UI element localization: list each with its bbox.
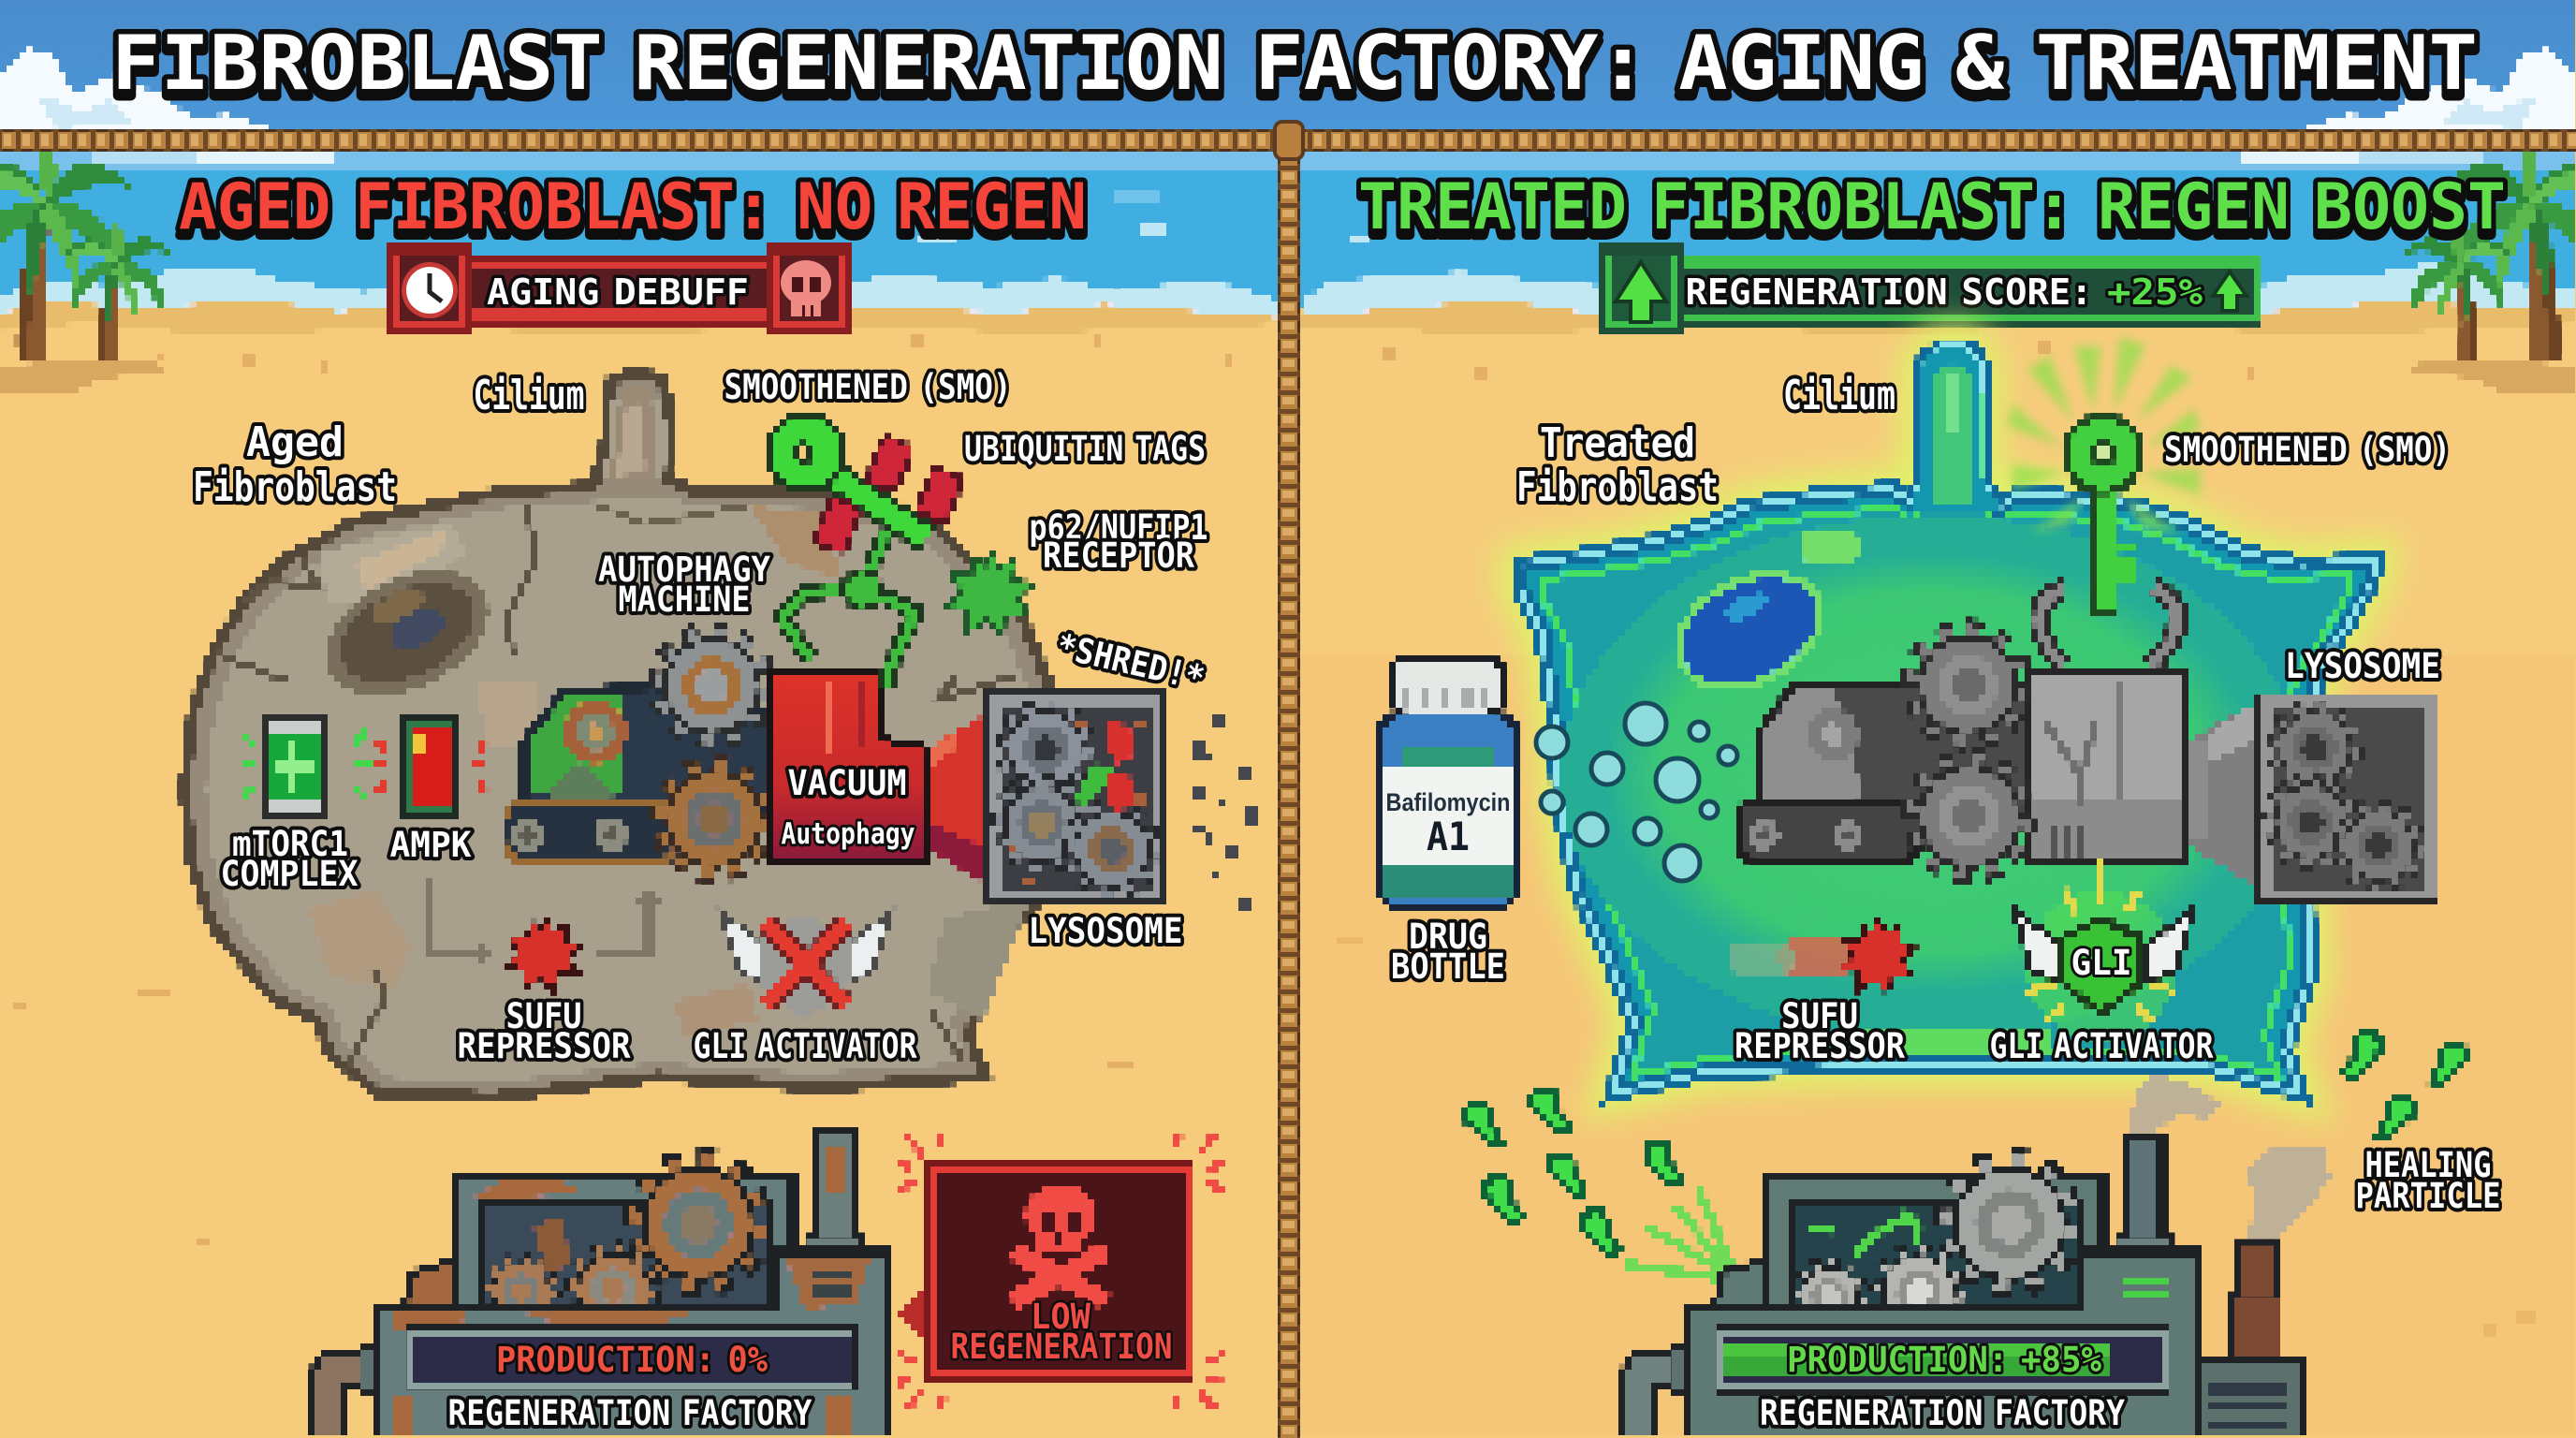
factory body	[1640, 1135, 2303, 1438]
alert sign	[898, 1159, 1195, 1384]
label: regeneration factory: REGENERATION FACTORY	[1760, 1393, 2126, 1433]
title: FIBROBLAST REGENERATION FACTORY: AGING & TREATMENT	[111, 20, 2478, 107]
smoke	[2130, 1072, 2331, 1245]
rusty regeneration factory	[329, 1133, 888, 1438]
badge value: +25%	[2107, 271, 2203, 313]
label: SUFU repressor: SUFU	[1781, 996, 1858, 1036]
label: autophagy machine: AUTOPHAGY	[598, 550, 771, 590]
label: drug bottle: BOTTLE	[1391, 946, 1505, 987]
label: AMPK: AMPK	[389, 825, 472, 865]
label: shred: *SHRED!*	[1053, 626, 1208, 698]
grey machine	[1734, 588, 2254, 886]
machine housing	[503, 630, 777, 875]
label: vacuum: VACUUM	[788, 763, 906, 803]
panel: aged fibroblast	[179, 170, 1258, 1438]
badge frame	[386, 245, 850, 337]
cell glow	[1520, 346, 2376, 1093]
callout: low regeneration	[898, 1135, 1222, 1410]
label: p62 receptor: p62/NUFIP1	[1030, 507, 1208, 548]
label: treated fibroblast: Treated	[1540, 419, 1695, 467]
healing particles	[1462, 1031, 2469, 1257]
label: cilium: Cilium	[1783, 372, 1895, 419]
label: lysosome: LYSOSOME	[1028, 911, 1183, 951]
label: cilium: Cilium	[474, 372, 584, 419]
label: drug bottle	[1391, 917, 1505, 987]
panel: treated fibroblast	[1358, 170, 2506, 1438]
label: aged fibroblast	[193, 418, 397, 511]
labels: treated panel	[1391, 372, 2501, 1216]
green energy streaks	[1624, 1189, 1734, 1279]
label: autophagy machine	[598, 550, 771, 620]
key	[2062, 413, 2144, 613]
icon: mTORC1 battery	[240, 714, 371, 819]
icon: clock	[402, 262, 458, 318]
label: aged fibroblast: Aged	[246, 418, 344, 466]
icon: AMPK battery	[374, 714, 487, 819]
label: lysosome: LYSOSOME	[2285, 646, 2440, 686]
palm trees left	[0, 138, 171, 361]
label: mTORC1 complex: COMPLEX	[221, 854, 358, 894]
nucleus: aged	[306, 547, 508, 719]
icon: green claw	[782, 533, 915, 691]
label: healing particle: HEALING	[2364, 1145, 2492, 1185]
label: mTORC1 complex: mTORC1	[232, 824, 348, 864]
burst ticks	[899, 1135, 1222, 1410]
label: GLI activator: GLI ACTIVATOR	[693, 1026, 917, 1066]
icon: activated smoothened key	[2008, 337, 2200, 613]
shield label: GLI	[2071, 943, 2132, 983]
factory body	[329, 1133, 888, 1438]
label: GLI activator: GLI ACTIVATOR	[1990, 1026, 2214, 1066]
label: healing particle	[2355, 1145, 2501, 1216]
label: SUFU repressor	[457, 996, 631, 1066]
label: SUFU repressor	[1734, 996, 1906, 1066]
icon: SUFU repressor fading	[1728, 916, 1919, 996]
heading: treated: TREATED FIBROBLAST: REGEN BOOST	[1358, 170, 2506, 244]
heading: aged: AGED FIBROBLAST: NO REGEN	[179, 170, 1087, 244]
shield art	[2014, 861, 2193, 1041]
labels: aged panel	[193, 367, 1208, 1066]
label: ubiquitin tags: UBIQUITIN TAGS	[964, 429, 1206, 469]
vacuum	[768, 668, 986, 885]
badge frame	[1599, 245, 2263, 337]
label: treated fibroblast	[1516, 419, 1719, 511]
icon: GLI shield active	[2014, 861, 2193, 1041]
badge: aging debuff	[386, 245, 850, 337]
icon: small up arrow	[2213, 271, 2247, 311]
icon: big up arrow	[1616, 262, 1666, 322]
label: mTORC1 complex	[221, 824, 358, 894]
icon: disabled GLI activator	[721, 913, 891, 1020]
lysosome: aged	[984, 689, 1168, 906]
label: low regeneration: REGENERATION	[951, 1327, 1172, 1367]
label: treated fibroblast: Fibroblast	[1516, 463, 1719, 511]
production readout: 85%: PRODUCTION: +85%	[1787, 1340, 2102, 1380]
label: aged fibroblast: Fibroblast	[193, 463, 397, 511]
label: regeneration factory: REGENERATION FACTORY	[447, 1393, 812, 1433]
bottle label: A1	[1427, 814, 1470, 859]
production readout: 0%: PRODUCTION: 0%	[496, 1340, 768, 1380]
icon: SUFU repressor	[504, 913, 585, 993]
icon: smoothened key with ubiquitin tags	[765, 412, 964, 553]
badge: regeneration score	[1599, 245, 2263, 337]
debris particles	[1191, 715, 1258, 910]
icon: p62 receptor	[944, 547, 1036, 638]
label: SUFU repressor: REPRESSOR	[1734, 1026, 1906, 1066]
badge label: AGING DEBUFF	[487, 271, 749, 313]
autophagy machine	[503, 630, 1168, 906]
icon: skull	[781, 260, 831, 316]
label: low regeneration: LOW	[1031, 1297, 1091, 1337]
label: healing particle: PARTICLE	[2355, 1176, 2501, 1216]
lysosome: treated	[2254, 692, 2440, 905]
icon: drug bottle	[1377, 655, 1519, 910]
key glow rays	[2008, 337, 2200, 534]
label: autophagy: Autophagy	[781, 817, 915, 851]
label: autophagy machine: MACHINE	[618, 580, 751, 620]
bottle label	[1385, 788, 1511, 859]
label: low regeneration	[951, 1297, 1172, 1367]
label: drug bottle: DRUG	[1409, 917, 1487, 957]
aged cell body	[184, 372, 1051, 1097]
label: p62 receptor	[1030, 507, 1208, 576]
bottle body	[1377, 655, 1519, 910]
healthy regeneration factory	[1640, 1072, 2331, 1438]
label: p62 receptor: RECEPTOR	[1043, 536, 1195, 576]
bottle label: Bafilomycin	[1385, 788, 1511, 816]
label: SUFU repressor: SUFU	[505, 996, 582, 1036]
signal arrows	[429, 876, 663, 970]
badge label: REGENERATION SCORE:	[1685, 271, 2093, 313]
palm trees right	[2405, 138, 2576, 361]
drug bubbles	[1536, 703, 1737, 881]
label: smoothened: SMOOTHENED (SMO)	[2164, 430, 2451, 470]
label: SUFU repressor: REPRESSOR	[457, 1026, 631, 1066]
nucleus: treated	[1655, 548, 1844, 714]
treated cell body	[1520, 345, 2376, 1093]
label: smoothened: SMOOTHENED (SMO)	[724, 367, 1011, 407]
